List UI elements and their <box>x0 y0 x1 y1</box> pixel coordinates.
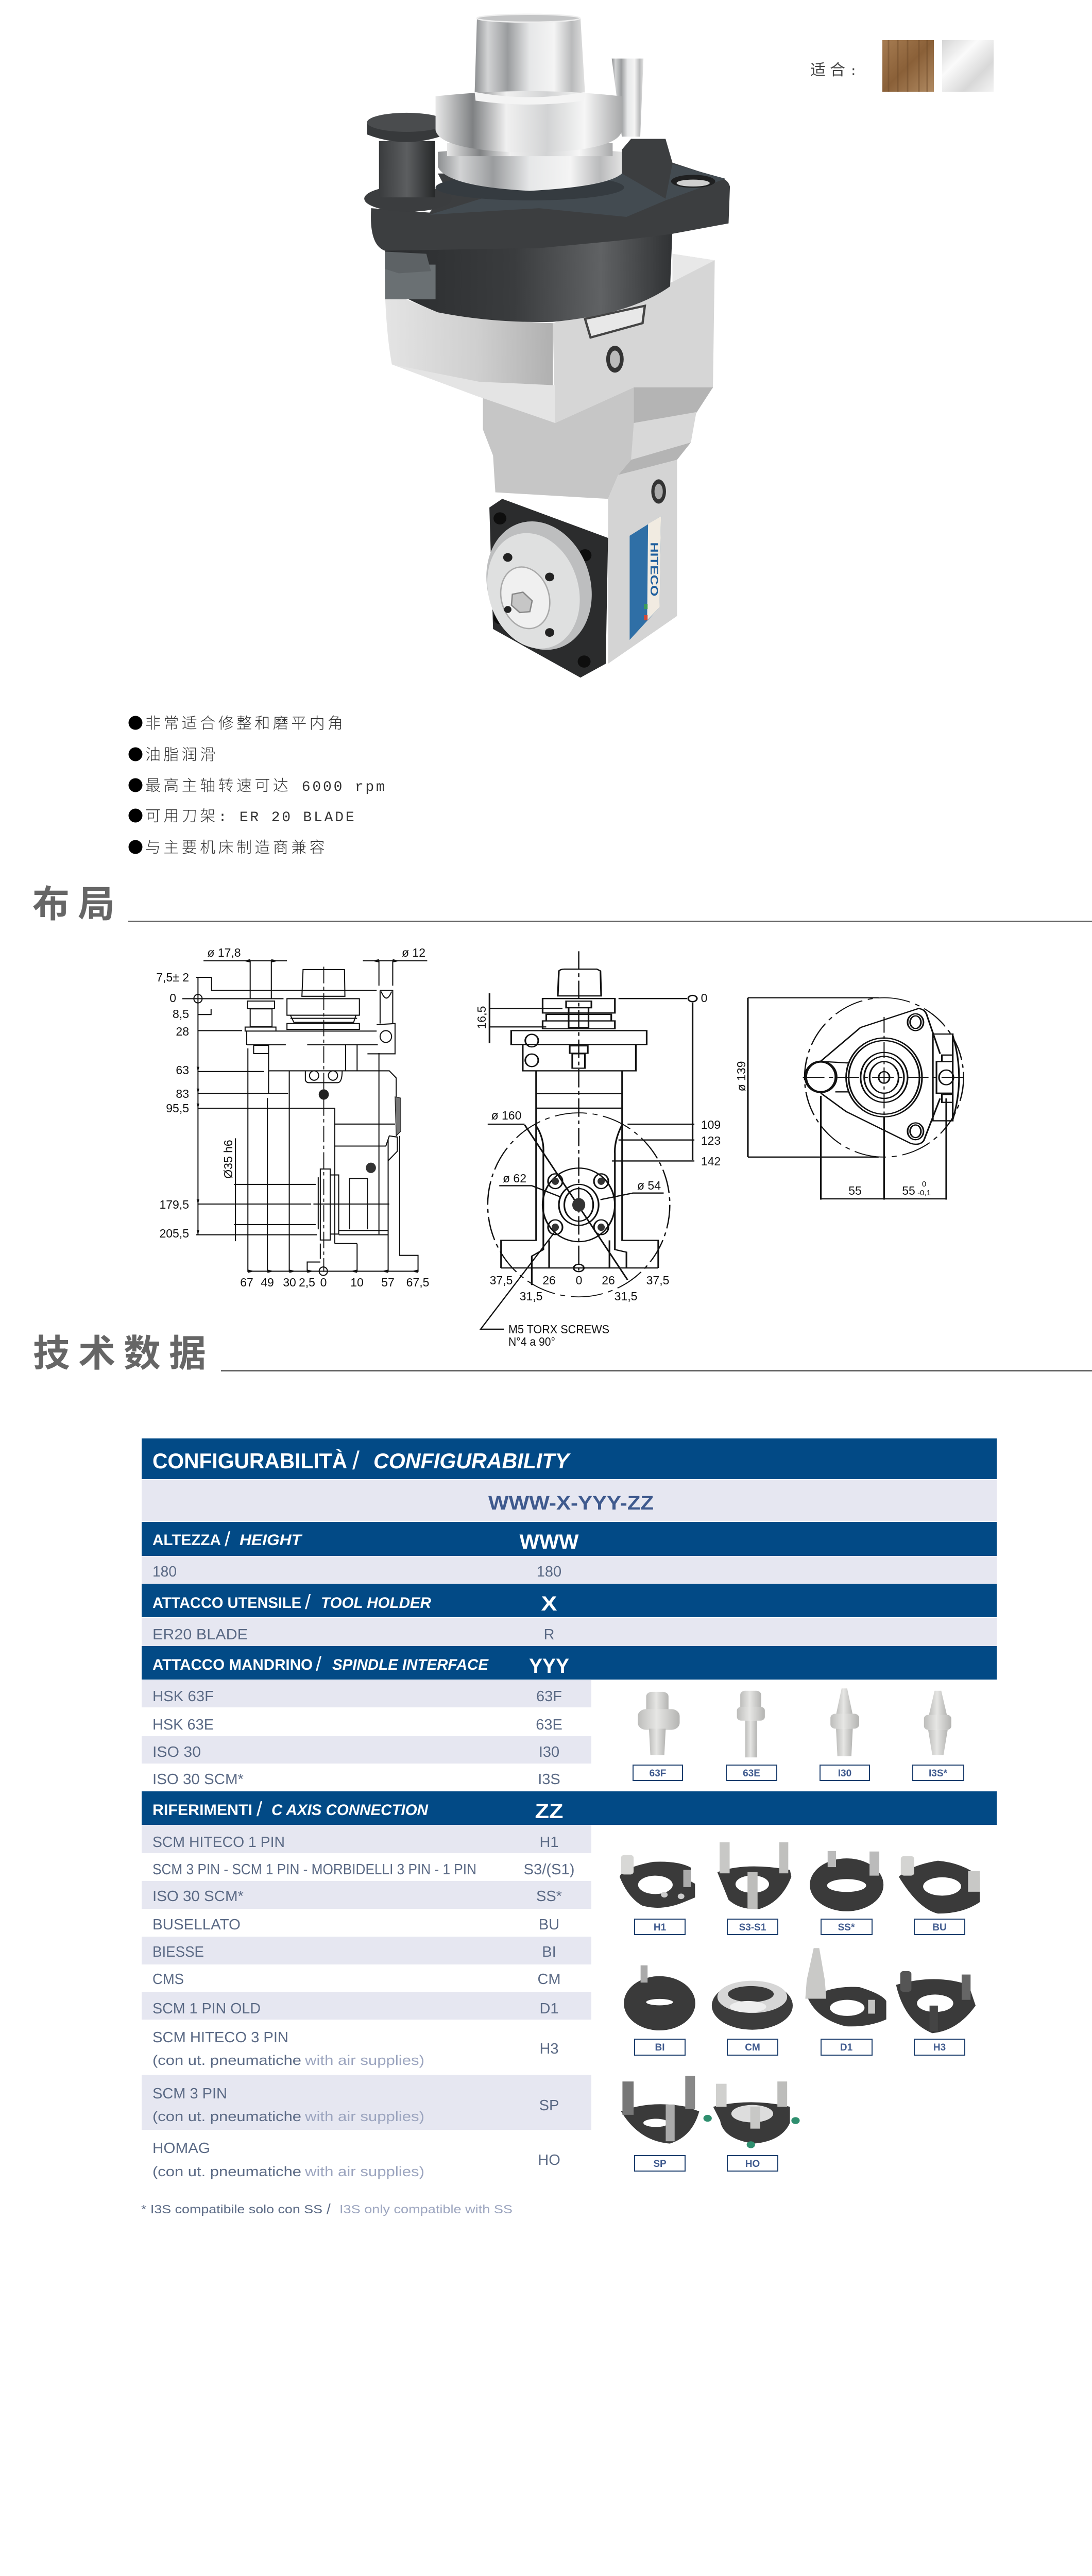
dimension labels: front view <box>475 991 721 1303</box>
row: CMS: CM <box>537 1971 561 1988</box>
bullet 3: 最高主轴转速可达 6000 rpm <box>145 777 387 795</box>
section: tool holder: ATTACCO UTENSILE <box>152 1595 301 1612</box>
row: 180: 180 <box>152 1564 177 1580</box>
pin I3S <box>924 1691 951 1755</box>
ring HO <box>704 2081 800 2148</box>
dimension labels: front view: 31,5 <box>615 1290 637 1303</box>
row: Homag: (con ut. pneumatiche <box>152 2164 301 2179</box>
row: SCM 3 pin pneumatic: (con ut. pneumatiche <box>152 2109 301 2124</box>
row: ISO 30 SCM connection: ISO 30 SCM* <box>152 1888 244 1905</box>
dimension labels: side view: 205,5 <box>159 1227 189 1240</box>
pin 63E <box>737 1691 765 1757</box>
tag: D1: D1 <box>840 2042 853 2053</box>
dimension labels: front view: 37,5 <box>646 1274 669 1287</box>
row: Biesse: BIESSE <box>152 1944 204 1960</box>
dimension labels: front view: 0 <box>576 1274 582 1287</box>
dimension labels: top view: -0,1 <box>917 1189 931 1197</box>
row: HSK 63E <box>152 1717 562 1733</box>
row: SCM Hiteco 3 pin: SCM HITECO 3 PIN <box>152 2029 288 2046</box>
section: spindle interface: / <box>316 1653 322 1675</box>
product label: HITECO: HITECO <box>648 542 660 597</box>
row: SCM 3 pin pneumatic: with air supplies) <box>304 2109 424 2124</box>
callout: M5 torx screws <box>508 1323 609 1348</box>
section: spindle interface: ATTACCO MANDRINO <box>152 1656 313 1673</box>
dimension labels: top view: 55 <box>902 1184 915 1197</box>
C axis connection thumbnails <box>620 1842 980 2171</box>
section: spindle interface <box>142 1646 997 1680</box>
row: SCM Hiteco 1 pin: H1 <box>539 1834 559 1851</box>
row: SCM Hiteco 3 pin <box>152 2029 559 2068</box>
row: SCM 3 pin pneumatic: SCM 3 PIN <box>152 2086 227 2102</box>
tag: BI: BI <box>655 2042 664 2053</box>
bullet 1: 非常适合修整和磨平内角 <box>145 715 346 732</box>
section: C axis connection: C AXIS CONNECTION <box>271 1802 429 1819</box>
tag: 63F: 63F <box>650 1768 666 1779</box>
section: C axis connection: ZZ <box>535 1800 564 1823</box>
tag: I3S <box>913 1765 964 1781</box>
row: SCM Hiteco 1 pin <box>142 1825 591 1853</box>
row: Busellato: BU <box>539 1917 559 1933</box>
dimension labels: front view: 142 <box>701 1155 721 1168</box>
pin 63F <box>638 1692 680 1755</box>
dimension labels: front view: 0 <box>701 991 707 1005</box>
section: height <box>142 1522 997 1556</box>
dimension labels: side view: 10 <box>350 1276 364 1289</box>
section: tool holder: X <box>541 1592 557 1615</box>
section: C axis connection: RIFERIMENTI <box>152 1802 252 1819</box>
footnote: * I3S compatibile solo con SS <box>141 2202 322 2216</box>
callout: M5 torx screws: N°4 a 90° <box>508 1335 555 1348</box>
tag: 63E <box>726 1765 777 1781</box>
technical drawing: front view <box>475 951 721 1348</box>
dimension labels: front view: 26 <box>602 1274 615 1287</box>
row: SCM 3 pin: S3/(S1) <box>523 1861 575 1878</box>
configuration table <box>141 1438 997 2217</box>
row: ER20 blade: ER20 BLADE <box>152 1626 248 1643</box>
dimension labels: side view: 63 <box>176 1063 189 1077</box>
section: tool holder: / <box>305 1591 311 1614</box>
dimension labels: front view: 37,5 <box>490 1274 513 1287</box>
section: spindle interface: SPINDLE INTERFACE <box>332 1656 489 1673</box>
row: CMS: CMS <box>152 1971 184 1988</box>
row: SCM Hiteco 3 pin: with air supplies) <box>304 2053 424 2068</box>
heading: technical data: 技术数据 <box>33 1333 214 1375</box>
dimension labels: side view: 57 <box>381 1276 395 1289</box>
tag: H1: H1 <box>654 1922 667 1933</box>
tag: BU: BU <box>932 1922 947 1933</box>
dimension labels: side view: Ø35 h6 <box>221 1140 235 1179</box>
tool holder <box>436 174 624 200</box>
product photo: angle head aggregate <box>364 14 730 677</box>
tag: SS: SS* <box>838 1922 855 1933</box>
row: ISO 30 SCM <box>152 1771 560 1788</box>
dimension labels: side view: 0 <box>320 1276 327 1289</box>
tag: I30 <box>820 1765 869 1781</box>
tag: 63E: 63E <box>743 1768 760 1779</box>
table title bar: CONFIGURABILITY <box>373 1449 571 1473</box>
dimension labels: front view: 26 <box>542 1274 556 1287</box>
ring BU <box>899 1856 980 1913</box>
row: Homag: HOMAG <box>152 2140 210 2157</box>
configuration code row: WWW-X-YYY-ZZ <box>488 1493 654 1514</box>
row: SCM 1 pin old: D1 <box>539 2001 559 2017</box>
dimension labels: top view: ø 139 <box>735 1061 748 1091</box>
row: SCM 3 pin pneumatic <box>142 2075 591 2130</box>
tag: BI <box>635 2039 685 2055</box>
dark housing <box>385 230 672 322</box>
row: HSK 63F: HSK 63F <box>152 1688 214 1705</box>
footnote: / <box>327 2201 331 2217</box>
dimension labels: side view: 30 <box>283 1276 296 1289</box>
row: CMS <box>152 1971 561 1988</box>
dimension labels: side view: 67,5 <box>406 1276 429 1289</box>
tag: HO <box>727 2156 778 2171</box>
technical drawing: side view <box>156 946 429 1289</box>
section: C axis connection <box>142 1791 997 1825</box>
tag: SP <box>635 2156 685 2171</box>
dimension labels: side view: 49 <box>261 1276 274 1289</box>
dimension labels: front view: ø 62 <box>503 1172 526 1185</box>
row: ISO 30 SCM connection <box>142 1881 591 1909</box>
table title bar: / <box>352 1446 360 1475</box>
upper right block <box>553 254 715 423</box>
tag: S3-S1: S3-S1 <box>739 1922 766 1933</box>
row: SCM Hiteco 3 pin: (con ut. pneumatiche <box>152 2053 301 2068</box>
tag: SP: SP <box>653 2159 667 2170</box>
dimension labels: top view: 55 <box>848 1184 862 1197</box>
technical drawing: top view <box>735 998 964 1199</box>
tag: H3 <box>914 2039 965 2055</box>
row: Biesse <box>142 1937 591 1964</box>
tag: HO: HO <box>745 2159 760 2170</box>
row: ISO 30 SCM connection: SS* <box>536 1888 562 1905</box>
section: spindle interface: YYY <box>529 1655 569 1677</box>
row: SCM 1 pin old: SCM 1 PIN OLD <box>152 2001 261 2017</box>
row: ER20 blade <box>142 1618 997 1646</box>
dimension labels: side view: ø 17,8 <box>207 946 241 959</box>
dimension labels: front view: 16,5 <box>475 1006 488 1029</box>
ring H3 <box>896 1971 976 2033</box>
section: tool holder: TOOL HOLDER <box>321 1595 431 1612</box>
bullet 5: 与主要机床制造商兼容 <box>145 839 328 856</box>
dimension labels: front view: ø 54 <box>637 1179 661 1192</box>
tag: 63F <box>633 1765 682 1781</box>
row: SCM 1 pin old <box>142 1992 591 2020</box>
dimension labels: front view: 31,5 <box>520 1290 542 1303</box>
row: SCM 3 pin pneumatic: SP <box>539 2097 559 2114</box>
section: height: HEIGHT <box>240 1532 303 1549</box>
label plate <box>629 516 661 640</box>
row: Homag: with air supplies) <box>304 2164 424 2179</box>
row: ISO 30: ISO 30 <box>152 1744 201 1760</box>
swatch: glossy metal <box>942 40 994 92</box>
suitable-for label: 适合: <box>810 62 862 79</box>
row: 180 <box>142 1556 997 1584</box>
section: height: WWW <box>519 1531 579 1553</box>
dimension labels: front view: 123 <box>701 1134 721 1147</box>
ring SP <box>621 2076 699 2144</box>
row: ISO 30 SCM: I3S <box>538 1771 560 1788</box>
tag: S3-S1 <box>727 1919 778 1935</box>
tag: H1 <box>635 1919 685 1935</box>
tag: CM <box>727 2039 778 2055</box>
row: Busellato <box>152 1917 559 1933</box>
row: ISO 30: I30 <box>539 1744 559 1760</box>
dimension labels: top view <box>735 1061 931 1197</box>
row: HSK 63F: 63F <box>536 1688 562 1705</box>
row: HSK 63E: HSK 63E <box>152 1717 214 1733</box>
dimension labels: side view: 7,5± 2 <box>156 971 189 984</box>
bullet 4: 可用刀架: ER 20 BLADE <box>145 808 356 826</box>
dimension labels: side view: 179,5 <box>159 1198 189 1211</box>
tag: I3S: I3S* <box>929 1768 948 1779</box>
pin I30 <box>830 1688 859 1756</box>
dimension labels: top view: 0 <box>922 1180 926 1189</box>
ring D1 <box>805 1948 886 2026</box>
tag: SS <box>821 1919 872 1935</box>
dimension labels: side view: ø 12 <box>402 946 425 959</box>
tag: D1 <box>821 2039 872 2055</box>
tag: H3: H3 <box>933 2042 946 2053</box>
swatch: wood <box>882 40 934 92</box>
row: Homag: HO <box>538 2152 560 2168</box>
row: HSK 63F <box>142 1680 591 1707</box>
section: tool holder <box>142 1584 997 1617</box>
ring SS <box>810 1851 883 1911</box>
row: ISO 30 <box>142 1736 591 1764</box>
dimension labels: side view: 2,5 <box>299 1276 315 1289</box>
spindle interface thumbnails <box>633 1688 964 1781</box>
heading: layout: 布局 <box>32 884 123 925</box>
clamping bolt <box>364 185 452 212</box>
dimension labels: side view: 8,5 <box>173 1007 189 1021</box>
dimension labels: side view: 67 <box>240 1276 253 1289</box>
section: height: / <box>225 1528 231 1551</box>
dimension labels: front view: ø 160 <box>491 1109 521 1122</box>
dimension labels: side view: 0 <box>169 991 176 1005</box>
section: height: ALTEZZA <box>152 1532 221 1549</box>
heading: layout <box>32 884 1092 925</box>
ring CM <box>712 1981 793 2030</box>
heading: technical data <box>33 1333 1092 1375</box>
row: Homag <box>152 2140 560 2179</box>
bullet 2: 油脂润滑 <box>145 747 218 764</box>
ring H1 <box>620 1855 695 1908</box>
mounting plate and disc <box>489 499 608 677</box>
callout: M5 torx screws: M5 TORX SCREWS <box>508 1323 609 1336</box>
row: ER20 blade: R <box>544 1626 554 1643</box>
row: Busellato: BUSELLATO <box>152 1917 241 1933</box>
tag: CM: CM <box>745 2042 760 2053</box>
row: SCM 3 pin: SCM 3 PIN - SCM 1 PIN - MORBIDELLI 3 PIN - 1 PIN <box>152 1861 476 1878</box>
row: ISO 30 SCM: ISO 30 SCM* <box>152 1771 244 1788</box>
ring BI <box>624 1965 695 2030</box>
tag: I30: I30 <box>838 1768 851 1779</box>
dimension labels: side view: 95,5 <box>166 1101 189 1115</box>
configuration code row <box>142 1480 997 1521</box>
feature bullet list <box>129 715 387 856</box>
footnote: I3S only compatible with SS <box>339 2202 513 2216</box>
row: SCM Hiteco 1 pin: SCM HITECO 1 PIN <box>152 1834 285 1851</box>
dimension labels: side view: 83 <box>176 1087 189 1100</box>
table title bar <box>142 1438 997 1479</box>
dimension labels: side view: 28 <box>176 1025 189 1038</box>
tag: BU <box>914 1919 965 1935</box>
dimension labels: front view: 109 <box>701 1118 721 1131</box>
table title bar: CONFIGURABILITÀ <box>152 1449 347 1473</box>
ring S3-S1 <box>718 1842 791 1909</box>
dimension labels: side view <box>156 946 429 1289</box>
row: SCM Hiteco 3 pin: H3 <box>539 2041 559 2057</box>
row: HSK 63E: 63E <box>536 1717 562 1733</box>
section: C axis connection: / <box>257 1798 263 1821</box>
row: 180: 180 <box>537 1564 561 1580</box>
row: Biesse: BI <box>542 1944 556 1960</box>
footnote <box>141 2201 513 2217</box>
